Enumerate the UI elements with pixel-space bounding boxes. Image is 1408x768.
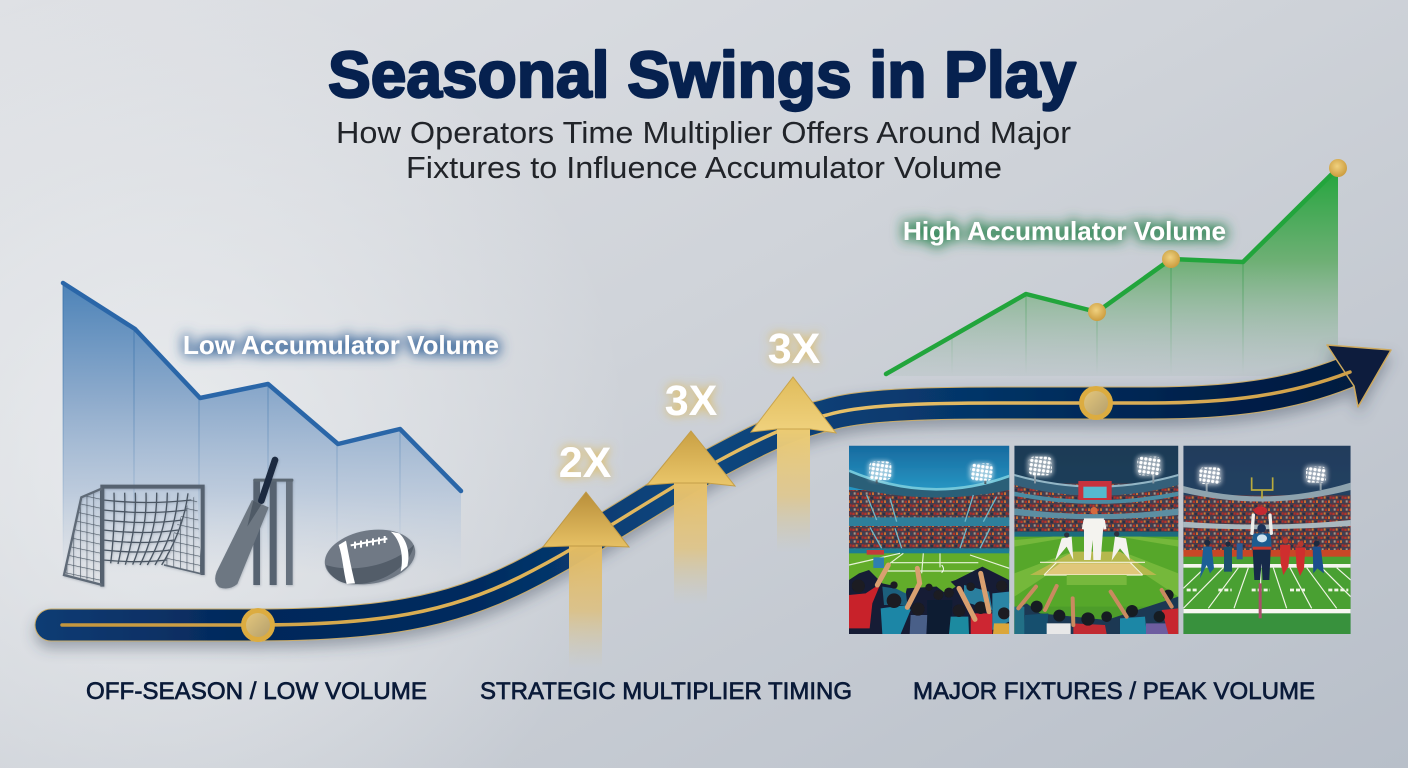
line: rising volume xyxy=(886,168,1338,374)
chart: low accumulator volume xyxy=(63,283,461,575)
floodlights xyxy=(868,461,993,484)
multiplier arrow: 3X high xyxy=(751,377,836,552)
label: low accumulator volume: Low Accumulator Volume xyxy=(183,330,499,360)
gold centre line xyxy=(62,372,1350,625)
title: Seasonal Swings in Play xyxy=(328,38,1076,111)
subtitle xyxy=(336,115,1071,185)
players xyxy=(1200,506,1324,580)
panel: cricket stadium xyxy=(1013,446,1178,634)
arrowhead xyxy=(1327,345,1391,407)
multiplier arrow: 2X xyxy=(543,492,629,668)
label: high accumulator volume: High Accumulator Volume xyxy=(903,216,1226,246)
floodlights xyxy=(1027,455,1162,483)
data points xyxy=(1088,159,1347,321)
goal post xyxy=(1252,477,1273,498)
label: strategic timing: STRATEGIC MULTIPLIER TIMING xyxy=(480,678,852,705)
multiplier label: 2X: 2X xyxy=(559,439,612,487)
multiplier label: 3X: 3X xyxy=(665,377,718,425)
chart: high accumulator volume xyxy=(886,159,1347,376)
scoreboard xyxy=(1078,481,1112,500)
icon: football goal xyxy=(64,487,203,587)
spectators xyxy=(1014,586,1178,634)
panel: american football stadium xyxy=(1183,446,1351,634)
icon: american football xyxy=(320,523,420,591)
spectators xyxy=(849,565,1010,634)
floodlights xyxy=(1198,465,1327,492)
panel: football stadium xyxy=(849,446,1010,634)
growth ribbon arrow xyxy=(51,345,1391,642)
subtitle: Fixtures to Influence Accumulator Volume xyxy=(406,150,1002,185)
label: major fixtures: MAJOR FIXTURES / PEAK VOLUME xyxy=(913,678,1315,705)
multiplier label: 3X high: 3X xyxy=(768,325,821,373)
subtitle: How Operators Time Multiplier Offers Around Major xyxy=(336,115,1071,150)
marker: peak xyxy=(1079,386,1113,420)
multiplier arrow: 3X xyxy=(647,431,735,604)
icon: cricket bat and stumps xyxy=(215,460,293,588)
label: off-season: OFF-SEASON / LOW VOLUME xyxy=(86,678,427,705)
players xyxy=(1055,507,1130,561)
marker: off-season xyxy=(241,608,275,642)
line: falling volume xyxy=(63,283,461,491)
